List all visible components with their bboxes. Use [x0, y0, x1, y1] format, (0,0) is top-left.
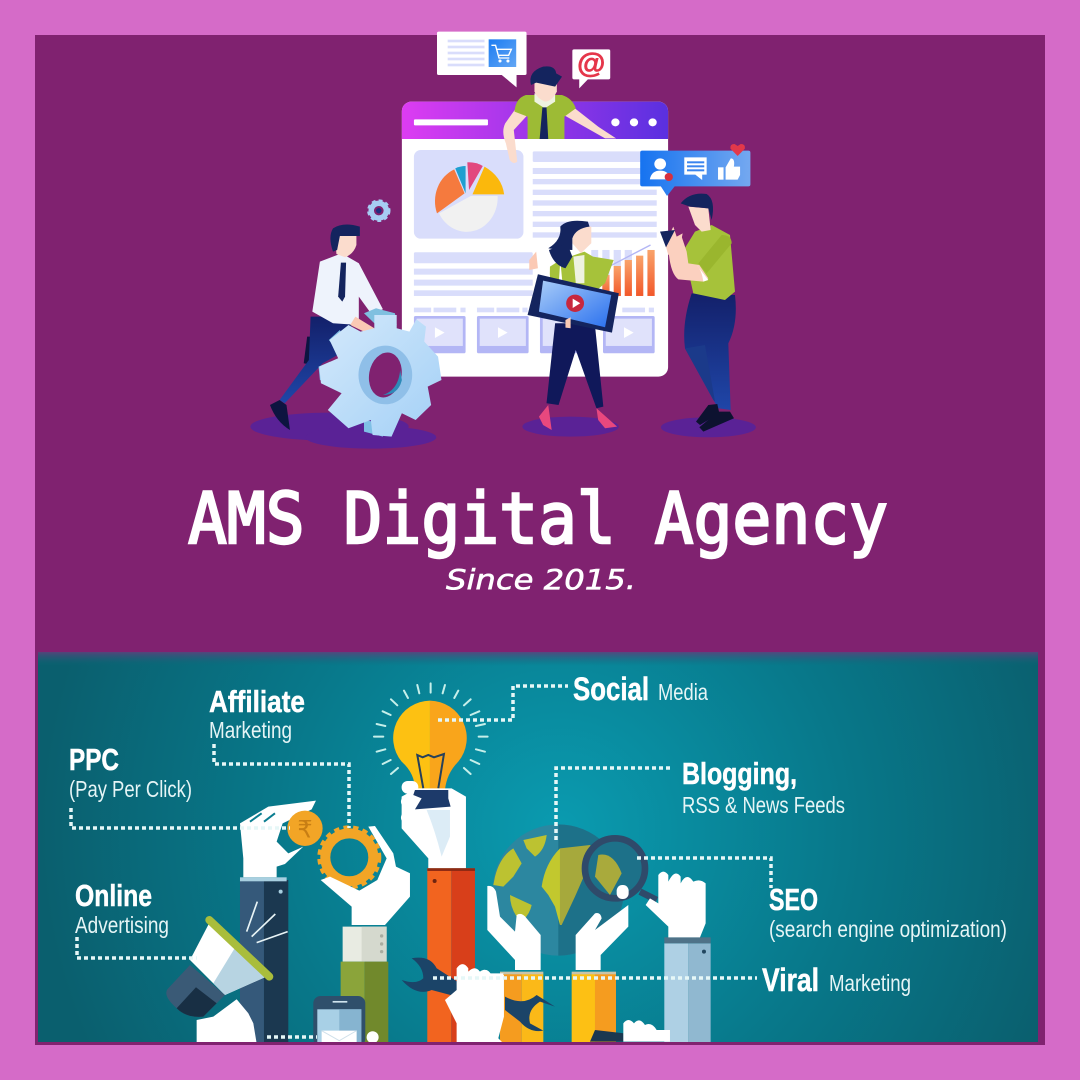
globe [493, 824, 624, 956]
dotted connector lines [71, 686, 771, 1037]
hand with wrench centre [445, 964, 504, 1043]
label: Affiliate Marketing: Marketing [209, 717, 292, 743]
sleeves [500, 937, 711, 1042]
person: man pushing gear [270, 225, 383, 430]
label: Social Media: Social [573, 671, 649, 707]
small gear icon [368, 201, 389, 221]
label: SEO [769, 888, 1006, 942]
label: Blogging: RSS & News Feeds [682, 792, 845, 818]
hands holding globe [487, 885, 629, 970]
megaphone [166, 920, 270, 1043]
label: PPC [70, 748, 191, 802]
person: woman with tablet [528, 221, 619, 430]
person: man with phone [660, 194, 736, 432]
speech bubble: email: @ [577, 48, 605, 80]
label: Viral Marketing: Marketing [829, 970, 911, 996]
wrench [402, 958, 457, 995]
label: Affiliate Marketing: Affiliate [209, 684, 305, 719]
magnifying glass [585, 838, 657, 900]
label: Affiliate Marketing [209, 684, 305, 743]
label: Viral Marketing: Viral [762, 962, 819, 998]
label: SEO: SEO [769, 882, 818, 917]
hand with coin: ₹ [297, 815, 313, 843]
speech bubble: email [572, 48, 610, 88]
video thumbnails [414, 316, 655, 353]
label: Social Media: Media [658, 679, 708, 705]
text lines left [414, 252, 654, 312]
floor shadows [250, 413, 756, 449]
hand raised right [646, 872, 706, 937]
label: Social Media [574, 676, 708, 700]
label: Online Advertising: Advertising [75, 912, 169, 938]
label: Blogging: Blogging, [682, 756, 797, 791]
label: PPC: PPC [69, 742, 119, 777]
large gear [319, 308, 441, 437]
pie chart card [414, 150, 523, 239]
hand with bulb [401, 781, 475, 1043]
hand with gear [321, 826, 410, 1043]
label: Online Advertising [75, 884, 168, 938]
light bulb [393, 701, 467, 790]
label: Viral Marketing [762, 967, 910, 996]
smartphone [313, 996, 379, 1046]
hand holding wrench [480, 970, 670, 1042]
bulb rays [374, 683, 488, 774]
panel: teal digital marketing banner [38, 650, 1038, 1046]
hand with coin [240, 801, 323, 1043]
social icons bubble [640, 144, 750, 196]
illustration: digital marketing team [250, 32, 756, 449]
label: SEO: (search engine optimization) [769, 916, 1007, 942]
orange gear [319, 827, 379, 887]
title: AMS Digital Agency [188, 478, 888, 560]
label: Blogging [683, 762, 844, 813]
speech bubble: shopping cart [437, 32, 527, 87]
bar chart [591, 245, 655, 296]
text lines right [533, 151, 657, 238]
globe and right hands illustration [480, 824, 711, 1042]
person: top man leaning over window [503, 66, 616, 163]
label: Online Advertising: Online [75, 878, 152, 913]
label: PPC: (Pay Per Click) [69, 776, 192, 802]
left hands illustration [166, 683, 488, 1046]
browser window [402, 102, 668, 377]
subtitle: Since 2015. [446, 563, 636, 596]
